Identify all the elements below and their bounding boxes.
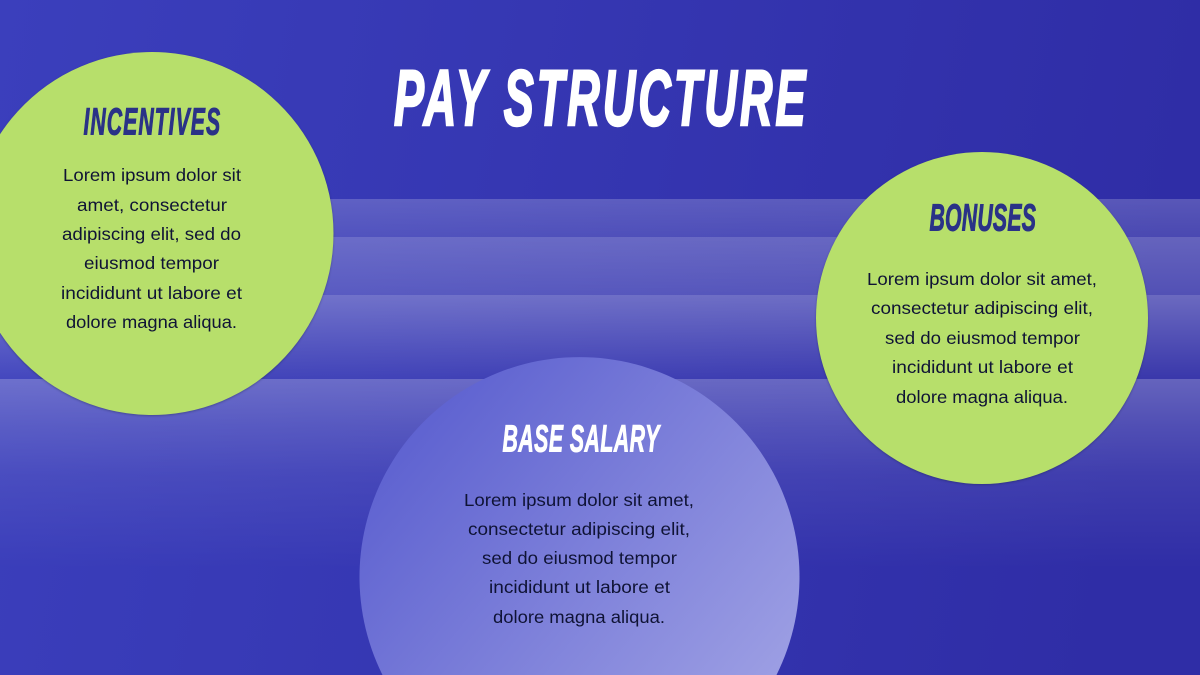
text block: base salary: incididunt ut labore et xyxy=(489,577,670,597)
text block: incentives: dolore magna aliqua. xyxy=(66,312,237,332)
text block: incentives: incididunt ut labore et xyxy=(61,283,242,303)
text block: base salary xyxy=(464,490,694,627)
title: PAY STRUCTURE xyxy=(394,54,807,142)
text block: bonuses xyxy=(867,269,1097,407)
text block: base salary: Lorem ipsum dolor sit amet, xyxy=(464,490,694,510)
text block: incentives: eiusmod tempor xyxy=(84,253,219,273)
panel: base salary xyxy=(359,357,800,675)
text block: incentives: Lorem ipsum dolor sit xyxy=(63,165,241,185)
text block: incentives xyxy=(61,165,242,332)
text block: base salary: consectetur adipiscing elit, xyxy=(468,519,690,539)
text block: bonuses: incididunt ut labore et xyxy=(892,357,1073,377)
text block: bonuses: sed do eiusmod tempor xyxy=(885,328,1080,348)
text block: incentives: amet, consectetur xyxy=(77,195,227,215)
heading: base salary: BASE SALARY xyxy=(502,417,661,460)
text block: bonuses: Lorem ipsum dolor sit amet, xyxy=(867,269,1097,289)
text block: base salary: dolore magna aliqua. xyxy=(493,607,665,627)
panel: bonuses xyxy=(816,152,1148,484)
heading: bonuses: BONUSES xyxy=(930,196,1036,239)
heading: incentives: INCENTIVES xyxy=(84,100,220,143)
panel: incentives xyxy=(0,52,333,415)
text block: bonuses: consectetur adipiscing elit, xyxy=(871,298,1093,318)
text block: bonuses: dolore magna aliqua. xyxy=(896,387,1068,407)
text block: incentives: adipiscing elit, sed do xyxy=(62,224,241,244)
text block: base salary: sed do eiusmod tempor xyxy=(482,548,677,568)
